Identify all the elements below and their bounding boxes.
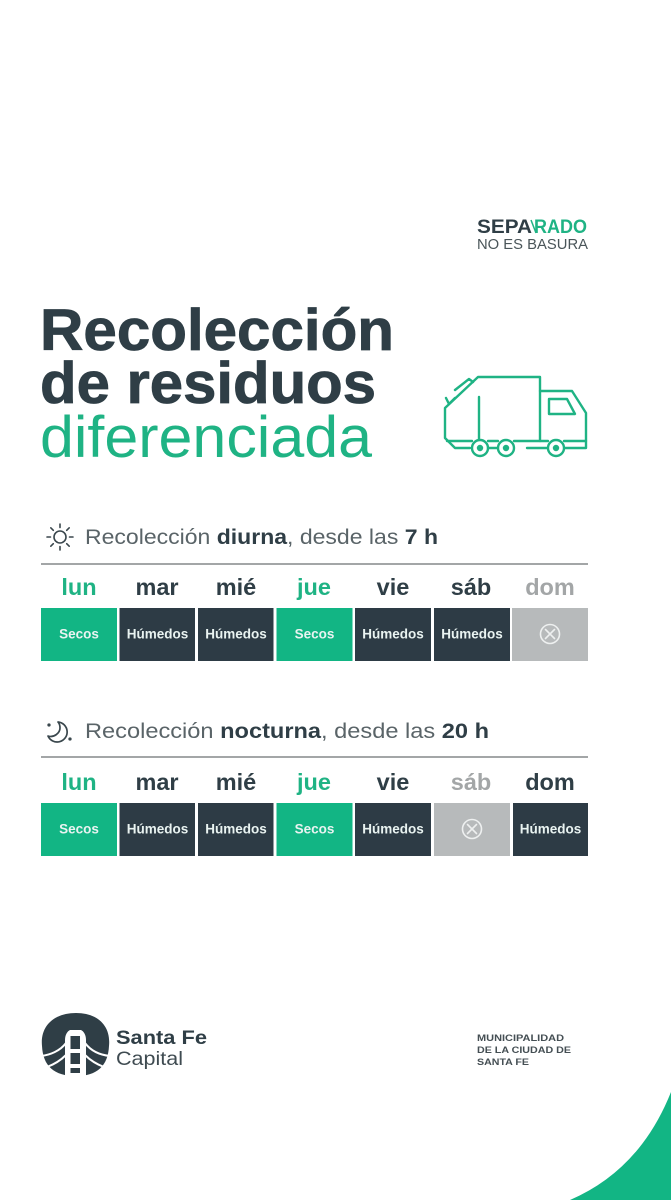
day labels: jue: [296, 574, 331, 600]
schedule row: daytime: Húmedos: [441, 626, 503, 642]
schedule row: daytime: Secos: [295, 626, 334, 642]
day labels: [61, 574, 575, 600]
day labels: lun: [61, 574, 97, 600]
day labels: mar: [135, 574, 179, 600]
day labels: mar: [135, 769, 179, 795]
day labels: [61, 769, 575, 795]
day labels: vie: [377, 574, 409, 600]
panel: night collection: [41, 720, 588, 856]
heading: night: Recolección nocturna , desde las 20 h: [85, 720, 489, 743]
title: de residuos: [40, 351, 376, 416]
schedule row: night: Húmedos: [520, 822, 581, 836]
schedule row: daytime: Húmedos: [127, 626, 188, 642]
schedule row: night: [41, 803, 588, 856]
day labels: dom: [525, 769, 575, 795]
day labels: jue: [296, 769, 331, 795]
brand: Separado no es basura: NO ES BASURA: [477, 237, 588, 253]
logo: Santa Fe Capital: [41, 1013, 207, 1077]
day labels: mié: [216, 769, 256, 795]
icon: garbage truck: [445, 377, 586, 456]
day labels: sáb: [451, 769, 491, 795]
day labels: dom: [525, 574, 575, 600]
day labels: lun: [61, 769, 97, 795]
schedule row: daytime: Húmedos: [205, 626, 267, 642]
day labels: sáb: [451, 574, 491, 600]
schedule row: daytime: [41, 608, 588, 661]
logo: Santa Fe Capital: Capital: [116, 1048, 183, 1070]
brand: Separado no es basura: [477, 217, 588, 253]
text: municipality: SANTA FE: [477, 1057, 529, 1068]
icon: moon: [48, 722, 71, 742]
title: [40, 298, 394, 470]
schedule row: daytime: Secos: [59, 626, 99, 642]
schedule row: night: Secos: [295, 822, 334, 836]
panel: daytime collection: [41, 524, 588, 661]
schedule row: night: Húmedos: [205, 822, 267, 836]
brand: Separado no es basura: SEPA: [477, 217, 532, 238]
brand: Separado no es basura: RADO: [534, 217, 587, 238]
icon: no collection: [462, 820, 482, 838]
title: Recolección: [40, 298, 394, 363]
logo: Santa Fe Capital: Santa Fe: [116, 1027, 207, 1049]
schedule row: night: Húmedos: [127, 822, 188, 836]
icon: bridge emblem: [41, 1013, 110, 1077]
text: municipality: MUNICIPALIDAD: [477, 1033, 564, 1044]
heading: daytime: Recolección diurna , desde las 7 h: [85, 526, 438, 549]
title: diferenciada: [40, 405, 373, 470]
schedule row: night: Húmedos: [362, 822, 424, 836]
icon: no collection: [540, 624, 560, 644]
icon: sun: [47, 524, 73, 550]
day labels: mié: [216, 574, 256, 600]
text: municipality: DE LA CIUDAD DE: [477, 1045, 571, 1056]
day labels: vie: [377, 769, 409, 795]
text: municipality: [477, 1033, 571, 1068]
corner accent: [570, 1092, 671, 1200]
schedule row: night: Secos: [59, 822, 99, 836]
schedule row: daytime: Húmedos: [362, 626, 424, 642]
